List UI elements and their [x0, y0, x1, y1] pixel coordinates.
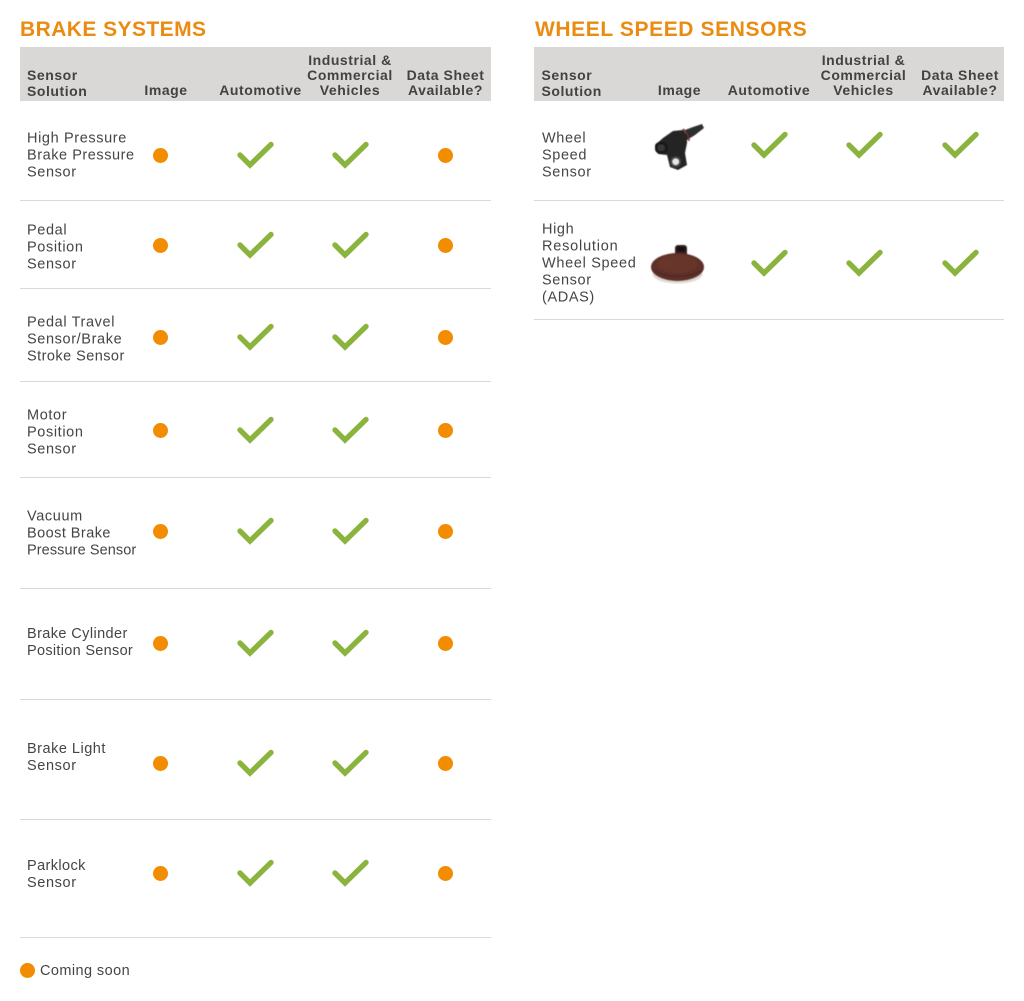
column: industrial and commercial vehicles: Industrial &	[822, 52, 905, 68]
legend text: Coming soon	[40, 963, 130, 979]
data sheet coming soon dot	[438, 756, 453, 770]
label: Sensor	[27, 874, 77, 890]
row: brake cylinder position sensor	[20, 589, 491, 700]
column: automotive: Automotive	[728, 82, 810, 98]
image coming soon dot	[153, 524, 168, 538]
column: industrial and commercial vehicles	[307, 52, 393, 98]
data sheet coming soon dot	[438, 524, 453, 538]
automotive check	[237, 232, 274, 259]
title: brake systems: BRAKE SYSTEMS	[20, 18, 206, 41]
column: image: Image	[144, 82, 188, 98]
label: Motor	[27, 408, 67, 424]
row: pedal position sensor	[20, 201, 491, 289]
column: sensor solution	[542, 67, 602, 99]
column: data sheet available: Data Sheet	[407, 67, 484, 83]
column: sensor solution: Sensor	[27, 67, 78, 83]
label: Pedal Travel	[27, 314, 115, 330]
legend dot	[20, 962, 35, 978]
industrial check	[332, 750, 369, 777]
label: Sensor	[27, 442, 77, 458]
label: Brake Light	[27, 741, 106, 757]
title: wheel speed sensors: WHEEL SPEED SENSORS	[535, 18, 807, 41]
label: Position	[27, 424, 84, 440]
industrial check	[332, 518, 369, 545]
header: brake systems table	[20, 47, 491, 101]
label: Parklock	[27, 858, 86, 874]
label: Sensor	[27, 164, 77, 180]
data sheet coming soon dot	[438, 238, 453, 252]
industrial check	[846, 250, 883, 277]
label	[542, 130, 592, 180]
label	[27, 130, 135, 180]
data sheet coming soon dot	[438, 148, 453, 162]
automotive check	[237, 518, 274, 545]
data sheet coming soon dot	[438, 866, 453, 880]
row: pedal travel sensor	[20, 289, 491, 382]
automotive check	[237, 860, 274, 887]
industrial check	[332, 630, 369, 657]
automotive check	[751, 132, 788, 159]
column: automotive: Automotive	[219, 82, 302, 98]
label	[27, 626, 133, 658]
industrial check	[332, 142, 369, 169]
image coming soon dot	[153, 422, 168, 438]
automotive check	[237, 416, 274, 444]
header: wheel speed sensors table	[534, 47, 1004, 101]
data sheet check	[942, 249, 980, 277]
label: Pressure Sensor	[27, 542, 136, 558]
data sheet coming soon dot	[438, 636, 453, 650]
label	[27, 408, 84, 458]
data sheet check	[942, 132, 979, 159]
label: Pedal	[27, 222, 67, 238]
image coming soon dot	[153, 756, 168, 770]
row: high resolution wheel speed sensor	[534, 201, 1004, 320]
row: vacuum boost brake pressure sensor	[20, 478, 491, 589]
label: Wheel	[542, 130, 586, 146]
column: data sheet available	[407, 67, 484, 98]
label: Sensor/Brake	[27, 332, 122, 348]
automotive check	[237, 324, 274, 351]
row: motor position sensor	[20, 382, 491, 478]
column: industrial and commercial vehicles: Industrial &	[308, 52, 392, 68]
column: industrial and commercial vehicles: Commercial	[821, 67, 906, 83]
label: Position	[27, 240, 84, 256]
label	[27, 222, 84, 272]
label: High Pressure	[27, 130, 127, 146]
label: Sensor	[27, 256, 77, 272]
image coming soon dot	[153, 330, 168, 344]
label: Speed	[542, 148, 587, 164]
column: data sheet available	[921, 67, 999, 98]
label: Boost Brake	[27, 526, 111, 542]
column: sensor solution: Sensor	[542, 67, 592, 83]
label: High	[542, 222, 574, 238]
industrial check	[332, 860, 369, 887]
automotive check	[237, 750, 274, 777]
label: Sensor	[542, 272, 592, 288]
industrial check	[846, 132, 883, 159]
automotive check	[751, 250, 788, 277]
image coming soon dot	[153, 148, 168, 162]
label	[27, 741, 106, 774]
data sheet coming soon dot	[438, 330, 453, 344]
label: Wheel Speed	[542, 256, 637, 272]
image coming soon dot	[153, 238, 168, 252]
label	[27, 858, 86, 890]
label	[27, 314, 125, 364]
label: Brake Pressure	[27, 148, 135, 164]
column: sensor solution	[27, 67, 87, 99]
column: data sheet available: Available?	[408, 82, 483, 98]
label: Position Sensor	[27, 642, 133, 658]
label: Resolution	[542, 238, 619, 254]
industrial check	[332, 416, 369, 444]
label	[542, 222, 637, 306]
label: Brake Cylinder	[27, 626, 128, 642]
automotive check	[237, 630, 274, 657]
column: sensor solution: Solution	[27, 83, 87, 99]
industrial check	[332, 324, 369, 351]
column: industrial and commercial vehicles: Commercial	[307, 67, 393, 83]
label: (ADAS)	[542, 290, 595, 306]
label: Vacuum	[27, 508, 83, 524]
label: Sensor	[542, 164, 592, 180]
industrial check	[332, 232, 369, 259]
data sheet coming soon dot	[438, 422, 453, 438]
column: industrial and commercial vehicles: Vehicles	[833, 82, 894, 98]
column: industrial and commercial vehicles: Vehicles	[320, 82, 380, 98]
image: wheel speed sensor	[654, 124, 704, 171]
row: brake light sensor	[20, 700, 491, 820]
image: high resolution wheel speed sensor	[650, 244, 705, 284]
label: Sensor	[27, 758, 77, 774]
row: high pressure brake pressure sensor	[20, 101, 491, 201]
row: wheel speed sensor	[534, 101, 1004, 201]
column: industrial and commercial vehicles	[821, 52, 906, 98]
column: data sheet available: Data Sheet	[921, 67, 999, 83]
column: sensor solution: Solution	[542, 83, 602, 99]
column: data sheet available: Available?	[922, 82, 998, 98]
image coming soon dot	[153, 636, 168, 650]
row: parklock sensor	[20, 820, 491, 938]
column: image: Image	[658, 82, 701, 98]
legend: coming soon	[20, 963, 130, 979]
automotive check	[237, 142, 274, 169]
image coming soon dot	[153, 866, 168, 880]
label: Stroke Sensor	[27, 348, 125, 364]
label	[27, 508, 136, 558]
